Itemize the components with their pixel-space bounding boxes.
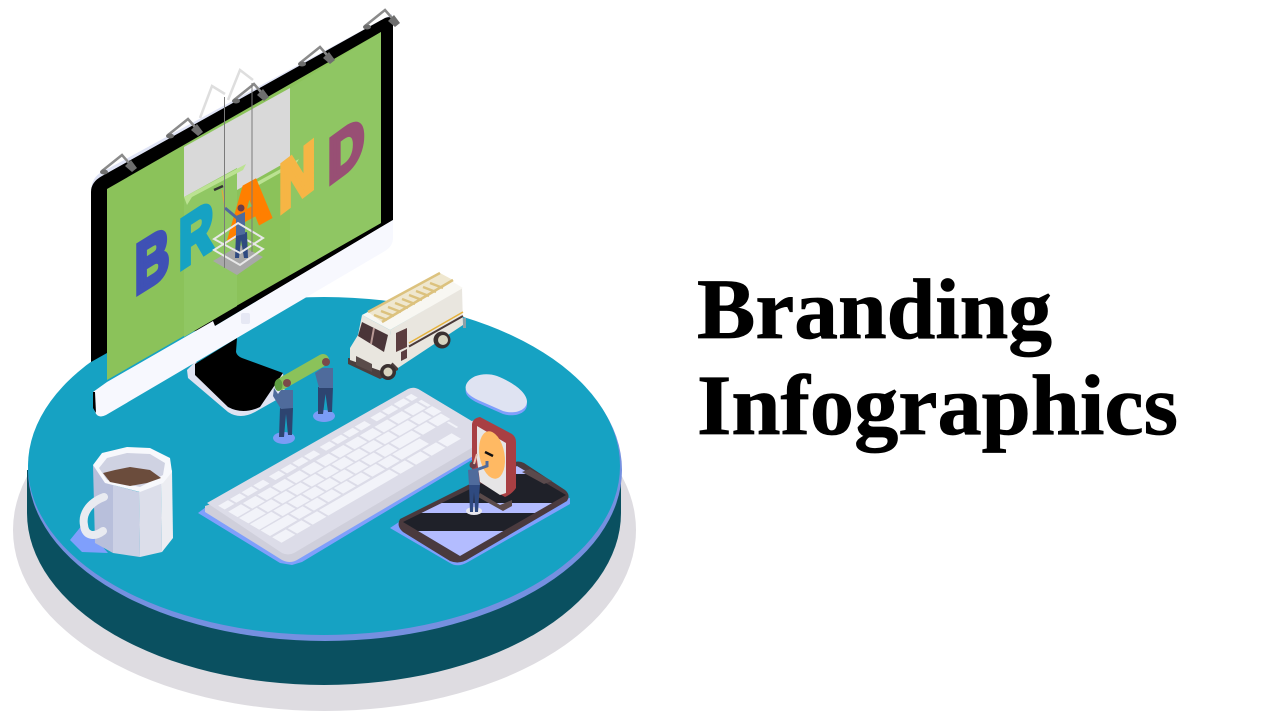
clamp 3 bbox=[232, 84, 269, 104]
keyboard shadow bbox=[198, 450, 475, 565]
monitor logo bbox=[241, 313, 250, 324]
carrier base right bbox=[313, 410, 335, 422]
top stripe bbox=[516, 466, 526, 474]
van stripes bbox=[409, 312, 463, 346]
billboard circle bbox=[476, 429, 508, 481]
van grille bbox=[356, 356, 372, 372]
disc side wall bbox=[27, 470, 621, 685]
suspension hooks bbox=[200, 70, 253, 118]
banner roll right bbox=[242, 159, 299, 194]
rear ladder hook bbox=[463, 318, 466, 328]
roll end bbox=[274, 379, 282, 391]
phone frame bbox=[399, 462, 569, 562]
billboard frame bbox=[472, 417, 516, 497]
letter D: D bbox=[328, 102, 364, 199]
clamp 5 bbox=[363, 10, 400, 30]
monitor screen bbox=[107, 32, 381, 380]
clamp 2 bbox=[166, 119, 203, 138]
clamp 4 bbox=[298, 47, 335, 66]
keyboard keys bbox=[221, 396, 470, 540]
van bumper bbox=[348, 358, 398, 379]
ropes bbox=[224, 83, 252, 268]
upper rail bbox=[214, 223, 263, 253]
roller bbox=[485, 452, 493, 456]
coffee mug bbox=[70, 447, 173, 557]
mug body bbox=[93, 465, 173, 557]
monitor stand bbox=[187, 320, 285, 416]
lower stripe bbox=[418, 531, 504, 556]
peeled grey panel bbox=[184, 88, 290, 197]
lower rail bbox=[214, 235, 263, 265]
saucer bbox=[70, 524, 108, 553]
letter R: R bbox=[179, 186, 213, 285]
title bbox=[697, 261, 1178, 453]
disc top bbox=[28, 297, 620, 635]
carrier base left bbox=[273, 432, 295, 444]
clamp 1 bbox=[100, 155, 137, 174]
van front bbox=[350, 315, 393, 372]
mug rim bbox=[93, 447, 172, 492]
monitor bbox=[91, 10, 400, 416]
phone notch bbox=[522, 469, 552, 484]
windshield pillar bbox=[371, 328, 374, 344]
disc rim bbox=[28, 299, 622, 641]
monitor back edge bbox=[91, 14, 392, 190]
monitor bezel bbox=[91, 17, 393, 362]
hanging platform with painter bbox=[200, 70, 263, 275]
van door window bbox=[396, 328, 407, 352]
billboard with worker bbox=[466, 417, 516, 515]
mug handle bbox=[84, 497, 104, 535]
upper stripe bbox=[422, 503, 552, 513]
phone screen bbox=[403, 466, 566, 556]
carrier right bbox=[315, 358, 333, 414]
van wheel front bbox=[380, 364, 396, 380]
smartphone bbox=[390, 462, 570, 566]
keyboard top bbox=[207, 388, 480, 554]
disc platform bbox=[13, 297, 636, 711]
chin left edge bbox=[93, 392, 96, 413]
van windshield bbox=[358, 322, 388, 352]
van door handle panel bbox=[401, 349, 407, 361]
title line 2: Infographics bbox=[697, 357, 1178, 453]
mug inner bbox=[99, 453, 165, 487]
phone shadow bbox=[390, 498, 570, 565]
monitor chin bbox=[93, 220, 393, 416]
BRAND lettering bbox=[136, 122, 364, 297]
van roof bbox=[362, 274, 463, 330]
painter bbox=[214, 186, 248, 258]
disc shadow bbox=[13, 349, 636, 711]
coffee bbox=[103, 467, 161, 486]
keyboard side bbox=[205, 420, 475, 562]
mouse body bbox=[466, 374, 527, 412]
billboard panel bbox=[477, 426, 506, 495]
van ladder bbox=[368, 273, 453, 322]
letter B: B bbox=[135, 212, 169, 310]
platform floor bbox=[213, 245, 263, 275]
banner roll left bbox=[184, 164, 246, 205]
carrier left bbox=[273, 379, 293, 437]
title line 1: Branding bbox=[697, 261, 1052, 357]
carriers with banner roll bbox=[273, 358, 335, 444]
mouse shadow bbox=[466, 377, 527, 415]
green roll bbox=[281, 360, 323, 384]
letter N: N bbox=[279, 124, 315, 228]
billboard base bbox=[478, 493, 512, 511]
van wheel rear bbox=[434, 332, 450, 348]
worker bbox=[468, 454, 487, 512]
worker base bbox=[466, 507, 482, 515]
letter A: A bbox=[228, 159, 271, 254]
keyboard bbox=[198, 388, 480, 565]
screen clamps bbox=[100, 10, 400, 174]
mouse bbox=[466, 374, 527, 415]
van side bbox=[390, 288, 463, 368]
delivery van bbox=[348, 273, 466, 380]
